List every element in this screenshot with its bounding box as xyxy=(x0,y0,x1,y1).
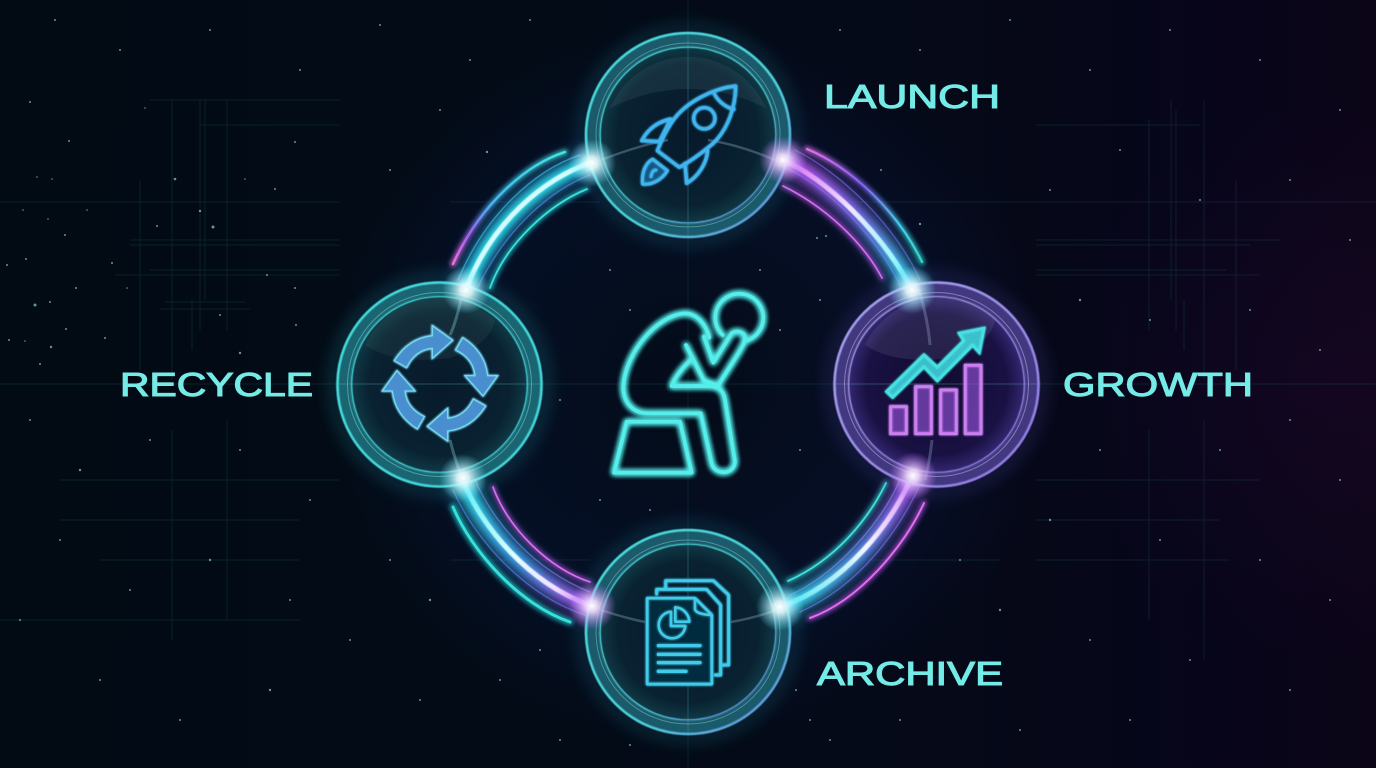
icon: recycle arrows xyxy=(382,326,498,441)
junction flares xyxy=(439,136,937,631)
node: archive xyxy=(582,526,794,738)
arc: recycle to launch xyxy=(453,152,590,288)
label: launch: LAUNCH xyxy=(824,78,1000,115)
label: growth: GROWTH xyxy=(1063,366,1253,403)
icon: growth chart xyxy=(887,328,984,434)
arc: archive to recycle xyxy=(453,480,590,622)
node: recycle xyxy=(334,278,546,490)
label: archive: ARCHIVE xyxy=(817,655,1003,692)
label: recycle: RECYCLE xyxy=(120,366,313,403)
arc: launch to growth xyxy=(783,149,922,290)
central icon: thinking person on a stool xyxy=(614,294,763,473)
icon: documents xyxy=(647,581,729,684)
arc: growth to archive xyxy=(780,473,924,618)
node: launch xyxy=(582,29,794,241)
cycle ring with four glowing arcs xyxy=(453,149,924,622)
icon: rocket xyxy=(642,86,736,184)
node: growth xyxy=(830,278,1042,490)
